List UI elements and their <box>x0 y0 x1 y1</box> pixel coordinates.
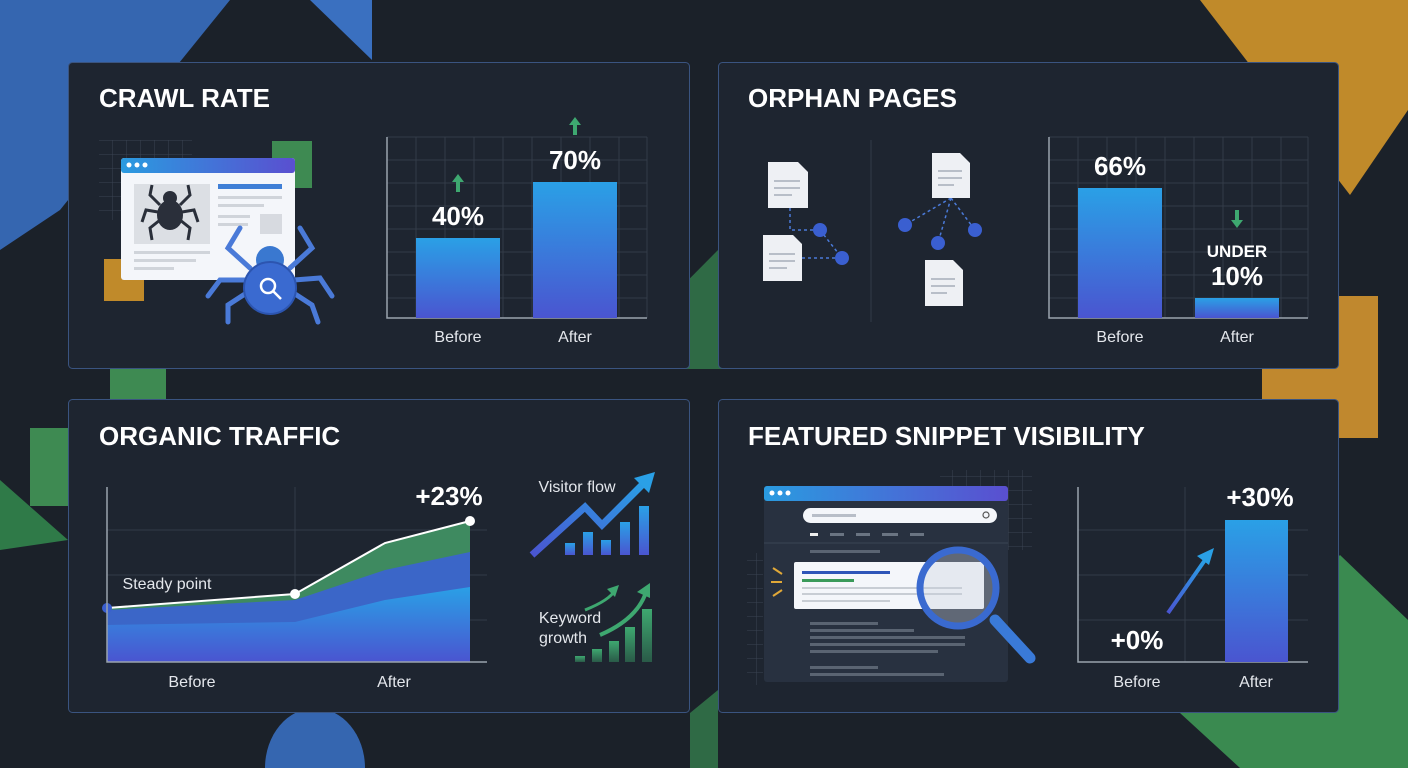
chart: snippet bars: +0% <box>1111 625 1163 655</box>
chart: crawl rate bars: Before <box>434 329 482 346</box>
chart: snippet bars: Before <box>1113 674 1161 691</box>
heading: featured snippet visibility: FEATURED SNIPPET VISIBILITY <box>748 421 1145 451</box>
chart: organic traffic area: After <box>377 674 412 691</box>
icon: orphan page diagrams <box>763 140 982 322</box>
heading: crawl rate: CRAWL RATE <box>99 83 270 113</box>
icon: visitor flow <box>532 472 655 555</box>
icon: keyword growth: growth <box>539 630 587 647</box>
panel: organic traffic <box>68 400 690 712</box>
chart: snippet bars: After <box>1239 674 1274 691</box>
panel: orphan pages <box>718 62 1338 368</box>
chart: organic traffic area: Before <box>168 674 216 691</box>
chart: orphan pages bars: 66% <box>1094 151 1146 181</box>
chart: snippet bars: +30% <box>1226 482 1294 512</box>
icon: search results with magnifier <box>747 470 1032 685</box>
chart: crawl rate bars <box>387 117 647 346</box>
chart: crawl rate bars: After <box>558 329 593 346</box>
chart: crawl rate bars: 70% <box>549 145 601 175</box>
heading: orphan pages: ORPHAN PAGES <box>748 83 957 113</box>
heading: organic traffic: ORGANIC TRAFFIC <box>99 421 340 451</box>
chart: organic traffic area <box>102 481 487 691</box>
chart: crawl rate bars: 40% <box>432 201 484 231</box>
panel: featured snippet visibility <box>718 400 1338 712</box>
chart: organic traffic area: Steady point <box>123 576 212 593</box>
icon: browser with spider <box>99 140 332 322</box>
chart: organic traffic area: +23% <box>415 481 483 511</box>
chart: orphan pages bars: UNDER <box>1207 242 1267 261</box>
icon: keyword growth <box>539 583 652 662</box>
panel: crawl rate <box>68 62 690 368</box>
chart: snippet bars <box>1078 482 1308 691</box>
chart: orphan pages bars <box>1049 137 1308 346</box>
icon: visitor flow: Visitor flow <box>538 479 616 496</box>
chart: orphan pages bars: Before <box>1096 329 1144 346</box>
chart: orphan pages bars: After <box>1220 329 1255 346</box>
icon: keyword growth: Keyword <box>539 610 601 627</box>
chart: orphan pages bars: 10% <box>1211 261 1263 291</box>
